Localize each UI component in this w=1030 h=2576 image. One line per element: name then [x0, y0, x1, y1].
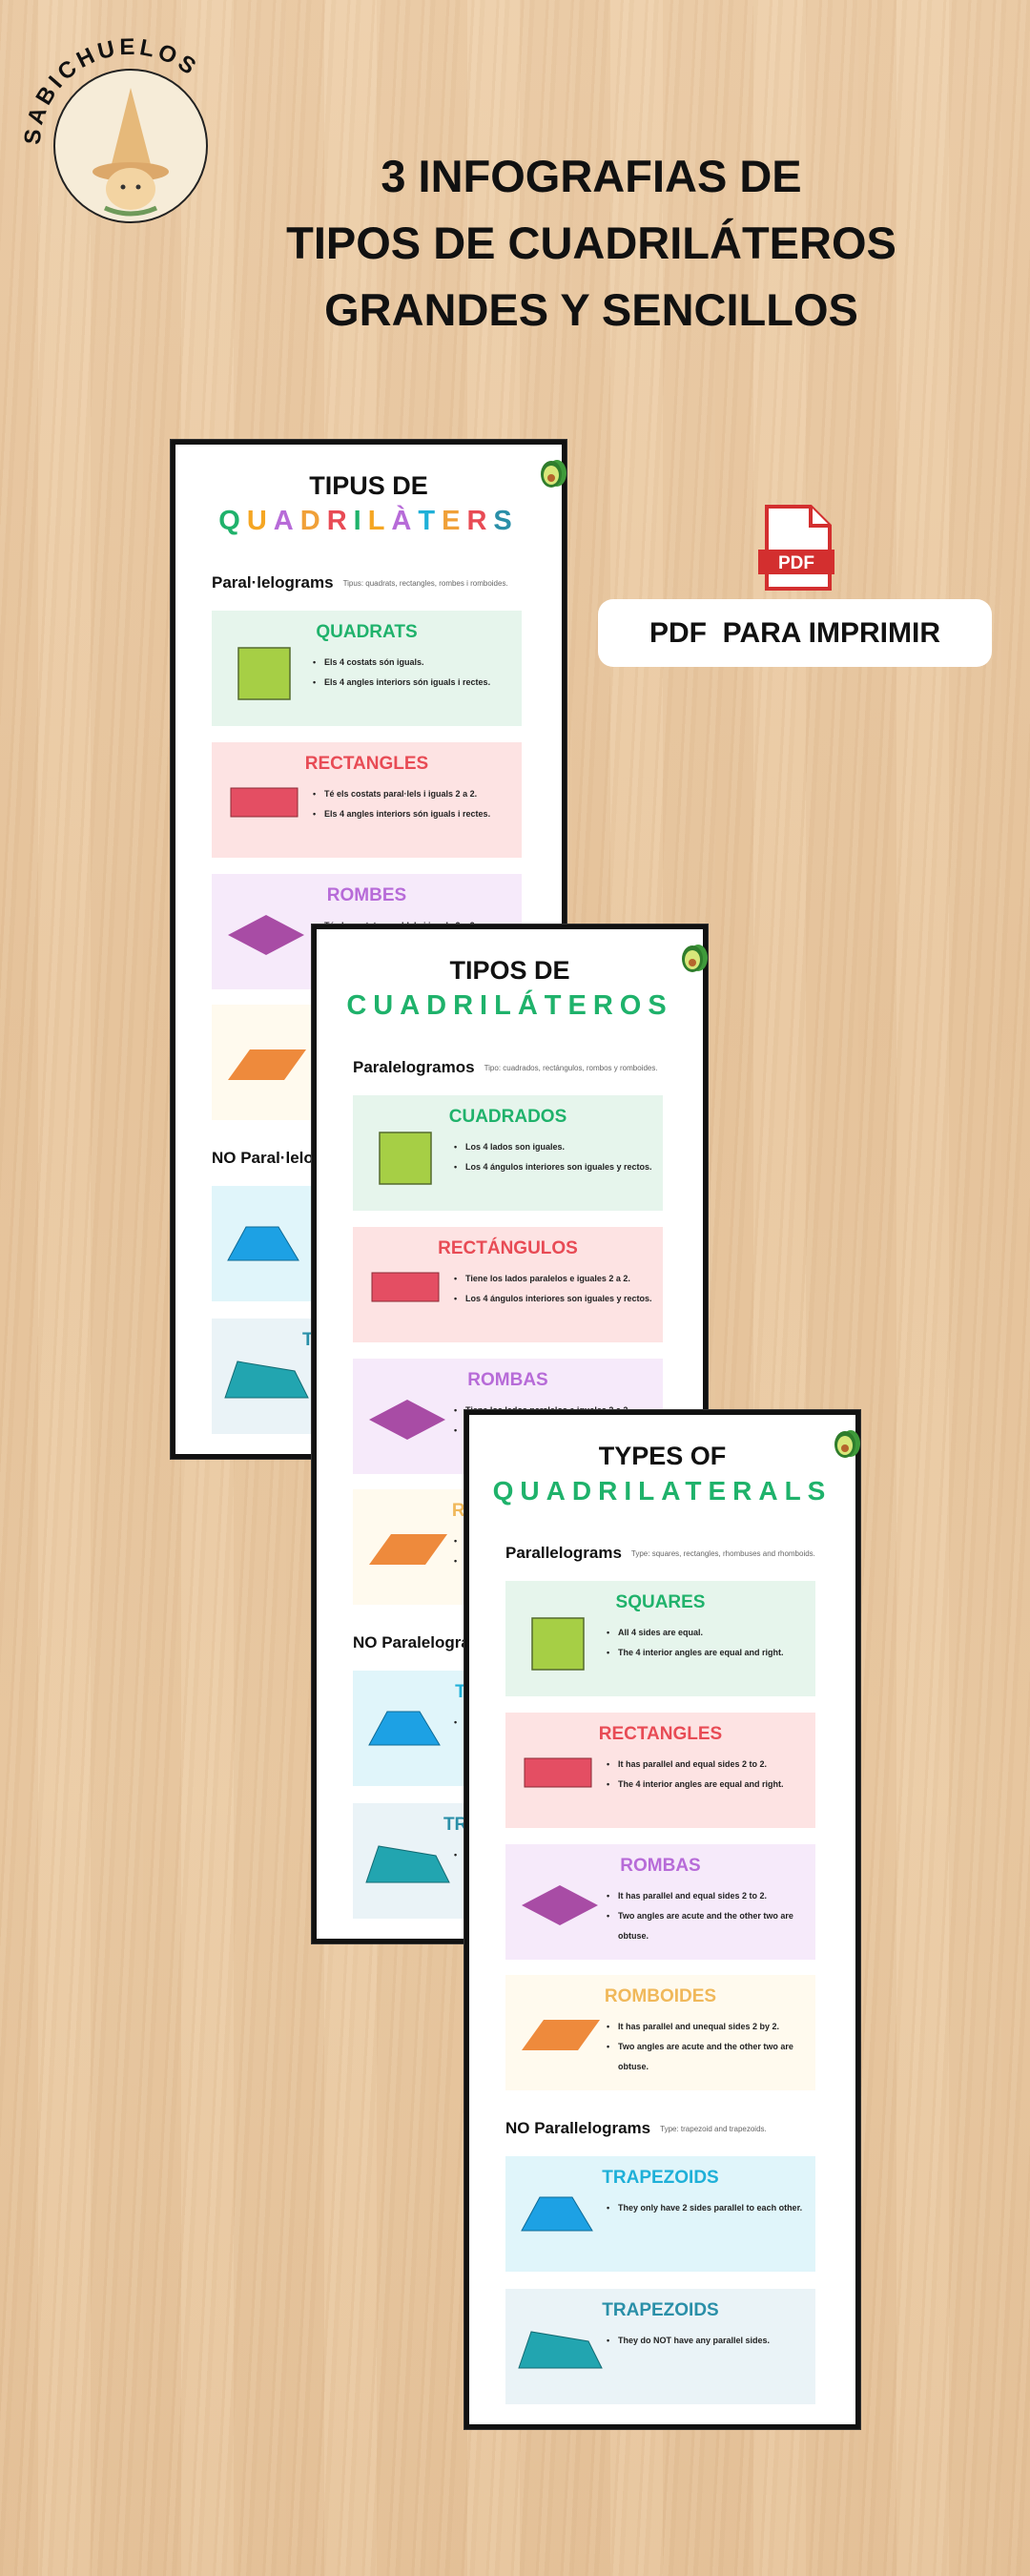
- panel: romboides: [212, 1005, 522, 1120]
- icon: avocado: [541, 460, 566, 488]
- panel: rectangles: It has parallel and equal sides 2 to 2.: [618, 1759, 767, 1769]
- panel: rectangles: RECTANGLES: [599, 1724, 722, 1744]
- panel: trapezoides: No tienen ningún lado paralelo.: [465, 1850, 593, 1859]
- section heading: Paral·lelograms Tipus: quadrats, rectangles, rombes i romboides.: [212, 573, 508, 592]
- panel: rombes: Té els costats paral·lels i iguals 2 a 2.: [324, 921, 477, 930]
- panel: trapezoids 2: They do NOT have any parallel sides.: [618, 2336, 770, 2345]
- panel: cuadrados: Los 4 lados son iguales.: [465, 1142, 565, 1152]
- panel: rombas: ROMBAS: [467, 1370, 548, 1390]
- panel: cuadrados: Los 4 ángulos interiores son iguales y rectos.: [465, 1162, 652, 1172]
- card subtitle: QUADRILATERALS: [493, 1476, 832, 1506]
- panel: trapecios: [353, 1671, 663, 1786]
- panel: trapecios: Solo tienen 2 lados paralelos entre sí.: [465, 1717, 619, 1727]
- section heading: NO Paralelogramos Tipo: trapecio y trapezoide.: [353, 1633, 605, 1652]
- panel: trapezoides: TRAPEZOIDES: [443, 1815, 572, 1835]
- panel: rombes: Dos angles són aguts i els altres dos obtusos.: [324, 941, 513, 950]
- panel: rectangles: Els 4 angles interiors són iguals i rectes.: [324, 809, 490, 819]
- panel: trapezoids 1: They only have 2 sides parallel to each other.: [618, 2203, 802, 2212]
- title: GRANDES Y SENCILLOS: [324, 284, 858, 335]
- panel: rombas: Two angles are acute and the other two are obtuse.: [618, 1911, 793, 1941]
- panel: quadrats: [212, 611, 522, 726]
- panel: rectangles: The 4 interior angles are equal and right.: [618, 1779, 784, 1789]
- panel: romboides: ROMBOIDES: [311, 1016, 422, 1036]
- panel: rombas: [505, 1844, 815, 1960]
- panel: quadrats: Els 4 costats són iguals.: [324, 657, 424, 667]
- section heading: NO Paral·lelograms Tipus: trapezi i trapezoide.: [212, 1149, 461, 1167]
- panel: rectangles: RECTANGLES: [305, 754, 428, 774]
- panel: romboides: Two angles are acute and the other two are obtuse.: [618, 2042, 793, 2071]
- panel: romboides: ROMBOIDES: [605, 1986, 716, 2006]
- logo: sabichuelos: [25, 38, 208, 223]
- card 2: spanish: [312, 924, 708, 1943]
- panel: rectangulos: [353, 1227, 663, 1342]
- section heading: Paralelogramos Tipo: cuadrados, rectángulos, rombos y romboides.: [353, 1058, 658, 1076]
- callout: pdf para imprimir: PDF PARA IMPRIMIR: [649, 617, 940, 649]
- icon: pdf file: PDF: [778, 553, 814, 573]
- panel: rectangles: [505, 1713, 815, 1828]
- section heading: Parallelograms Type: squares, rectangles, rhombuses and rhomboids.: [505, 1544, 815, 1562]
- panel: squares: The 4 interior angles are equal and right.: [618, 1648, 784, 1657]
- panel: rombas: Dos ángulos son agudos y los otros dos obtusos.: [465, 1425, 631, 1455]
- panel: trapezi: Només tenen 2 costats paral·lels entre si.: [324, 1233, 493, 1242]
- panel: squares: [505, 1581, 815, 1696]
- panel: romboides: It has parallel and unequal sides 2 by 2.: [618, 2022, 779, 2031]
- panel: trapezoide: [212, 1319, 522, 1434]
- panel: trapecios: TRAPECIOS: [455, 1682, 561, 1702]
- panel: trapezoides: [353, 1803, 663, 1919]
- panel: romboides: Té els costats paral·lels i desiguals 2 a 2.: [324, 1051, 492, 1061]
- panel: quadrats: QUADRATS: [316, 622, 418, 642]
- icon: pdf file: [758, 505, 834, 591]
- panel: squares: All 4 sides are equal.: [618, 1628, 703, 1637]
- card title: TYPES OF: [599, 1442, 726, 1470]
- panel: rectangulos: RECTÁNGULOS: [438, 1238, 578, 1258]
- panel: rectangulos: Tiene los lados paralelos e iguales 2 a 2.: [465, 1274, 630, 1283]
- icon: avocado: [682, 945, 708, 972]
- card 1: catalan: [171, 440, 566, 1459]
- panel: romboides: [353, 1489, 663, 1605]
- panel: rombas: ROMBAS: [620, 1856, 701, 1876]
- panel: squares: SQUARES: [616, 1592, 705, 1612]
- card title: TIPOS DE: [449, 956, 570, 985]
- panel: cuadrados: CUADRADOS: [449, 1107, 566, 1127]
- panel: rombes: [212, 874, 522, 989]
- card subtitle multicolor: QUADRILÀTERS: [218, 506, 519, 536]
- section heading: NO Parallelograms Type: trapezoid and trapezoids.: [505, 2119, 767, 2137]
- panel: romboides: ROMBOIDES: [452, 1501, 564, 1521]
- panel: trapezoide: No tenen cap costat paral·lel.: [324, 1365, 443, 1375]
- panel: cuadrados: [353, 1095, 663, 1211]
- panel: rombas: It has parallel and equal sides 2 to 2.: [618, 1891, 767, 1901]
- panel: romboides: Dos angles són aguts i els altres dos obtusos.: [324, 1071, 513, 1081]
- title: 3 INFOGRAFIAS DE: [381, 151, 802, 201]
- panel: romboides: Dos ángulos son agudos y los otros dos obtusos.: [465, 1556, 631, 1586]
- callout: pdf para imprimir: [598, 599, 992, 667]
- panel: quadrats: Els 4 angles interiors són iguals i rectes.: [324, 677, 490, 687]
- panel: rombes: ROMBES: [327, 885, 406, 905]
- card subtitle: CUADRILÁTEROS: [346, 990, 673, 1021]
- title: TIPOS DE CUADRILÁTEROS: [286, 218, 896, 268]
- panel: rectangles: Té els costats paral·lels i iguals 2 a 2.: [324, 789, 477, 799]
- panel: trapezoids 1: TRAPEZOIDS: [602, 2168, 719, 2188]
- panel: trapezoids 2: TRAPEZOIDS: [602, 2300, 719, 2320]
- panel: romboides: Tiene los lados paralelos y desiguales 2 a 2.: [465, 1536, 645, 1546]
- panel: rectangles: [212, 742, 522, 858]
- panel: rectangulos: Los 4 ángulos interiores son iguales y rectos.: [465, 1294, 652, 1303]
- card 3: english: [464, 1410, 860, 2429]
- panel: rombas: Tiene los lados paralelos e iguales 2 a 2.: [465, 1405, 630, 1415]
- icon: avocado: [834, 1430, 860, 1458]
- panel: trapezoide: TRAPEZOIDES: [302, 1330, 431, 1350]
- panel: trapezoids 1: [505, 2156, 815, 2272]
- panel: trapezi: [212, 1186, 522, 1301]
- panel: romboides: [505, 1975, 815, 2090]
- title: [286, 151, 896, 335]
- panel: trapezoids 2: [505, 2289, 815, 2404]
- card title: TIPUS DE: [309, 471, 428, 500]
- panel: rombas: [353, 1359, 663, 1474]
- panel: trapezi: TRAPEZIS: [322, 1197, 411, 1217]
